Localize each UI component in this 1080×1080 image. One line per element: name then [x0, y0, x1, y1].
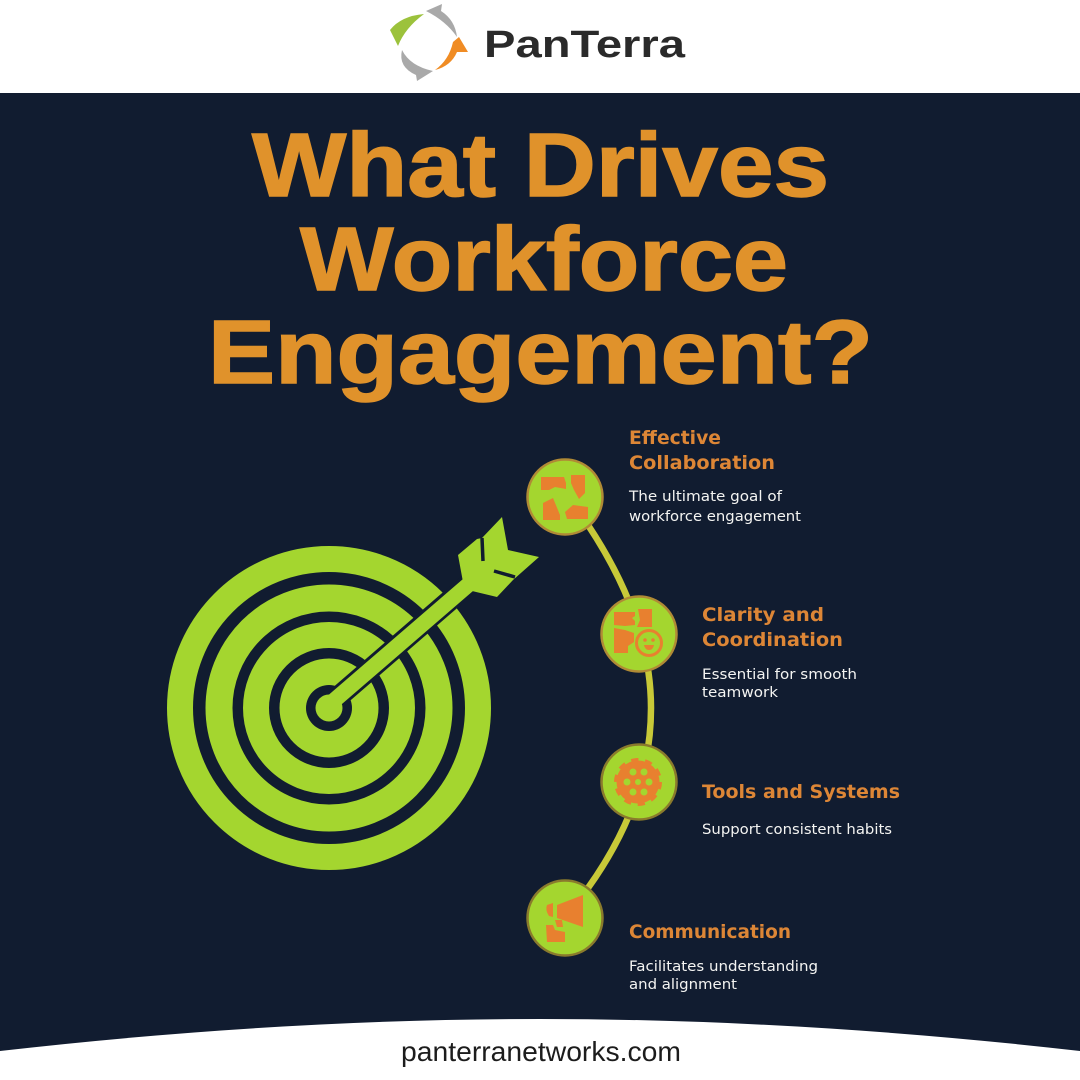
label: Effective: [629, 427, 721, 449]
label: Communication: [629, 921, 791, 943]
icon: megaphone: [528, 880, 602, 956]
step: Communication: Facilitates understanding: [629, 959, 818, 975]
step: Effective Collaboration: workforce engagement: [629, 509, 801, 525]
step: Effective Collaboration: Collaboration: [629, 452, 775, 474]
step: Clarity and Coordination: [602, 596, 857, 701]
step: Effective Collaboration: [528, 427, 801, 534]
step: Communication: and alignment: [629, 977, 737, 993]
icon: gear: [602, 744, 676, 820]
label: Clarity and: [702, 604, 824, 626]
step: Clarity and Coordination: Coordination: [702, 629, 843, 651]
chart: target with arrow: [180, 517, 539, 857]
step: Clarity and Coordination: teamwork: [702, 685, 779, 701]
label: Tools and Systems: [702, 781, 900, 803]
target rings: [180, 559, 478, 857]
arrow shaft cut-out: [323, 568, 485, 712]
title: [208, 116, 873, 403]
connector arc: [588, 525, 651, 888]
icon: puzzle and smile: [602, 596, 676, 672]
step: Communication: [528, 880, 818, 993]
step: Tools and Systems: Support consistent habits: [702, 822, 892, 838]
step: Effective Collaboration: The ultimate goal of: [628, 489, 783, 505]
footer website: panterranetworks.com: [401, 1036, 681, 1067]
title: Engagement?: [208, 303, 873, 403]
icon: four hands: [528, 460, 602, 534]
step: Clarity and Coordination: Essential for smooth: [702, 667, 857, 683]
step: Tools and Systems: [602, 744, 900, 838]
title: Workforce: [300, 210, 788, 310]
logo: PanTerra: [390, 4, 686, 81]
arrow: [325, 517, 539, 710]
title: What Drives: [252, 116, 829, 216]
icon: logo swirl: [390, 4, 468, 81]
logo wordmark: PanTerra: [484, 24, 686, 66]
